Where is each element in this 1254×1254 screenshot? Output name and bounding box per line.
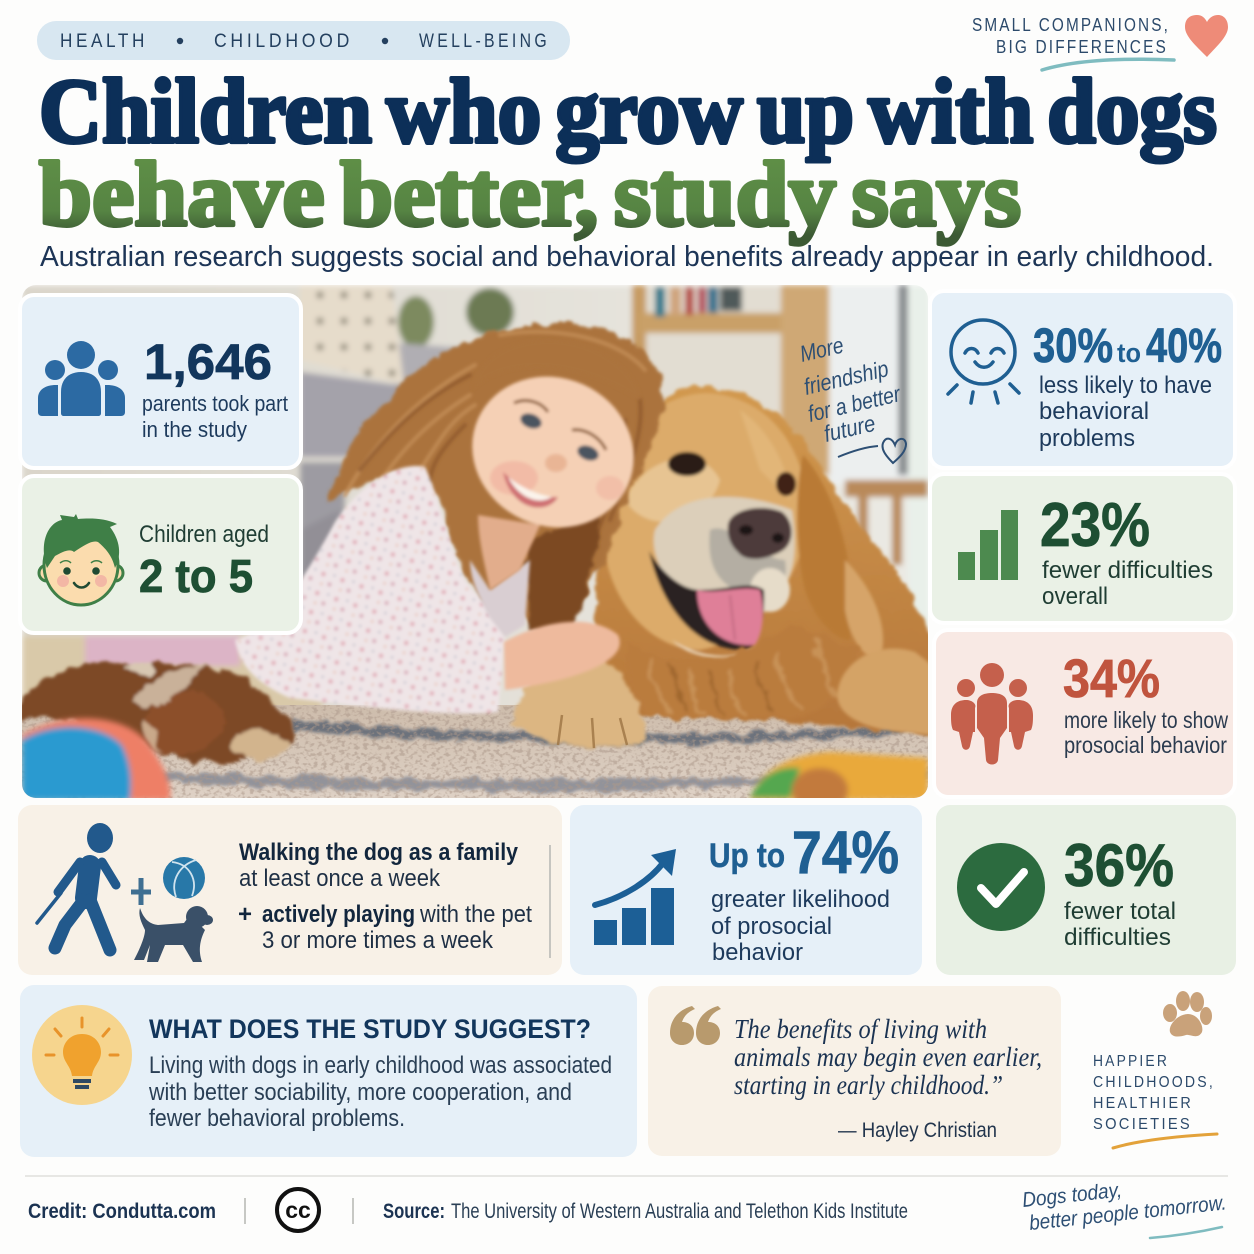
slogan: happier childhoods: CHILDHOODS,: [1093, 1074, 1215, 1091]
card: up to 74%: behavior: [712, 939, 803, 966]
panel: walking and playing: at least once a week: [239, 865, 441, 892]
tagline top right with heart: [972, 15, 1228, 70]
girl hair: [328, 323, 663, 625]
panel: quote: The benefits of living with: [734, 1014, 987, 1044]
handwritten note on photo: [797, 332, 906, 463]
icon: paw print: [1163, 991, 1212, 1037]
girl fringe: [472, 340, 640, 400]
girl dark hair strand by collar: [525, 505, 600, 630]
card: 1,646 parents: parents took part: [142, 391, 288, 416]
card: up to 74%: greater likelihood: [711, 886, 890, 913]
card: 30% to 40%: [930, 291, 1235, 468]
handwritten note on photo: future: [821, 410, 878, 447]
rug: [22, 705, 928, 800]
dog ear: [797, 455, 852, 640]
title: [39, 60, 1217, 245]
dog body: [590, 387, 932, 735]
card: up to 74%: 74%: [792, 819, 899, 886]
icon: growth chart with arrow: [594, 849, 676, 945]
icon: ball: [163, 857, 205, 899]
panel: walking and playing: +: [238, 901, 252, 928]
handwritten note on photo: friendship: [801, 355, 891, 400]
panel: what does the study suggest: WHAT DOES THE STUDY SUGGEST?: [149, 1014, 591, 1044]
room background: [22, 285, 928, 705]
icon: three people: [951, 663, 1033, 764]
card: 30% to 40%: problems: [1039, 425, 1135, 452]
icon: light bulb: [32, 1005, 132, 1105]
dog tongue: [697, 589, 763, 645]
card: 30% to 40%: less likely to have: [1039, 372, 1212, 399]
icon: rising bars: [958, 510, 1018, 580]
card: children aged 2 to 5: [20, 476, 301, 633]
card: 34% prosocial: prosocial behavior: [1064, 732, 1227, 758]
dog mouth: [649, 551, 764, 650]
panel: walking and playing: 3 or more times a week: [262, 927, 494, 954]
handwritten note on photo: for a better: [805, 380, 904, 427]
dog right paw: [837, 649, 932, 735]
title: Children who grow up with dogs: [39, 60, 1217, 162]
panel: what does the study suggest: [20, 985, 637, 1157]
handwritten note on photo: More: [797, 332, 846, 367]
girl neck: [478, 515, 540, 590]
card: 23% fewer difficulties: overall: [1042, 583, 1108, 610]
icon: check mark: [957, 843, 1045, 931]
girl face: [470, 374, 636, 530]
card: 30% to 40%: behavioral: [1039, 398, 1149, 425]
panel: quote: starting in early childhood.”: [734, 1070, 1003, 1100]
slogan: happier childhoods: SOCIETIES: [1093, 1116, 1192, 1133]
slogan: happier childhoods: [1093, 1053, 1217, 1148]
card: 34% prosocial: more likely to show: [1064, 707, 1228, 733]
card: 1,646 parents: [20, 295, 301, 468]
icon: creative commons: cc: [285, 1197, 311, 1223]
panel: what does the study suggest: fewer behavioral problems.: [149, 1105, 405, 1132]
icon: dog: [134, 906, 213, 962]
photo: girl hugging golden retriever: [22, 285, 932, 812]
card: 23% fewer difficulties: 23%: [1040, 491, 1150, 560]
icon: person walking: [37, 823, 116, 950]
girl pajama top: [235, 466, 505, 714]
topic pill: CHILDHOOD: [214, 31, 353, 52]
handwritten sign-off: better people tomorrow.: [1028, 1191, 1227, 1235]
card: 30% to 40%: 30%: [1033, 320, 1113, 373]
card: up to 74%: [570, 805, 922, 975]
icon: quotation mark: [670, 1006, 721, 1045]
dog nose: [728, 508, 792, 559]
card: 34% prosocial: [934, 630, 1235, 797]
dog front paw: [512, 650, 647, 747]
panel: quote: animals may begin even earlier,: [734, 1042, 1042, 1072]
girl collar: [470, 560, 530, 637]
panel: walking and playing: with the pet: [419, 901, 532, 928]
dog: [512, 387, 932, 748]
handwritten sign-off: Dogs today,: [1021, 1179, 1123, 1212]
girl: [235, 323, 663, 714]
card: 36% fewer total difficulties: fewer total: [1064, 898, 1176, 925]
tagline top right with heart: SMALL COMPANIONS,: [972, 15, 1170, 35]
girl nose: [545, 454, 567, 472]
handwritten sign-off: [1021, 1179, 1227, 1238]
ball and blurred toys: [22, 714, 928, 798]
footer source: The University of Western Australia and Telethon Kids Institute: [451, 1200, 908, 1223]
title: behave better, study says: [39, 143, 1021, 245]
teddy toy: [22, 662, 293, 762]
panel: walking and playing: [18, 805, 562, 975]
card: 36% fewer total difficulties: [936, 805, 1236, 975]
slogan: happier childhoods: HEALTHIER: [1093, 1095, 1193, 1112]
card: up to 74%: Up to: [709, 837, 785, 875]
topic pill: [37, 21, 570, 60]
panel: quote: — Hayley Christian: [838, 1119, 997, 1142]
tagline top right with heart: BIG DIFFERENCES: [996, 37, 1168, 57]
girl eyes: [518, 411, 544, 431]
topic pill: WELL-BEING: [419, 31, 550, 52]
subtitle: Australian research suggests social and behavioral benefits already appear in early childhood.: [40, 241, 1214, 273]
topic pill: HEALTH: [60, 31, 148, 52]
card: children aged 2 to 5: Children aged: [139, 521, 269, 548]
panel: what does the study suggest: Living with dogs in early childhood was associated: [149, 1052, 612, 1079]
panel: quote: [648, 986, 1061, 1156]
icon: child face: [39, 514, 123, 605]
card: 36% fewer total difficulties: difficulties: [1064, 924, 1171, 951]
footer source: Source:: [383, 1200, 445, 1223]
card: up to 74%: of prosocial: [711, 913, 832, 940]
panel: walking and playing: actively playing: [262, 901, 415, 928]
footer credit: Credit: Condutta.com: [28, 1200, 216, 1223]
panel: what does the study suggest: with better sociability, more cooperation, and: [148, 1079, 572, 1106]
dog muzzle: [654, 497, 795, 600]
slogan: happier childhoods: HAPPIER: [1093, 1053, 1169, 1070]
dog chest fur: [646, 637, 860, 722]
girl hand: [504, 622, 620, 690]
icon: creative commons: [277, 1189, 319, 1231]
card: children aged 2 to 5: 2 to 5: [139, 550, 253, 602]
card: 1,646 parents: in the study: [142, 417, 247, 442]
card: 34% prosocial: 34%: [1063, 649, 1160, 709]
card: 1,646 parents: 1,646: [144, 334, 272, 390]
card: 23% fewer difficulties: fewer difficulties: [1042, 557, 1213, 584]
card: 30% to 40%: to: [1117, 338, 1141, 368]
card: 30% to 40%: 40%: [1146, 320, 1222, 373]
icon: group of people: [38, 341, 125, 416]
icon: plus: [131, 878, 151, 905]
icon: smiling sun: [948, 320, 1019, 403]
card: 23% fewer difficulties: [930, 474, 1235, 623]
dog head: [602, 393, 808, 650]
card: 36% fewer total difficulties: 36%: [1064, 832, 1174, 899]
panel: walking and playing: Walking the dog as a family: [239, 839, 519, 866]
dog eyes: [668, 452, 706, 476]
girl smile: [503, 472, 558, 508]
